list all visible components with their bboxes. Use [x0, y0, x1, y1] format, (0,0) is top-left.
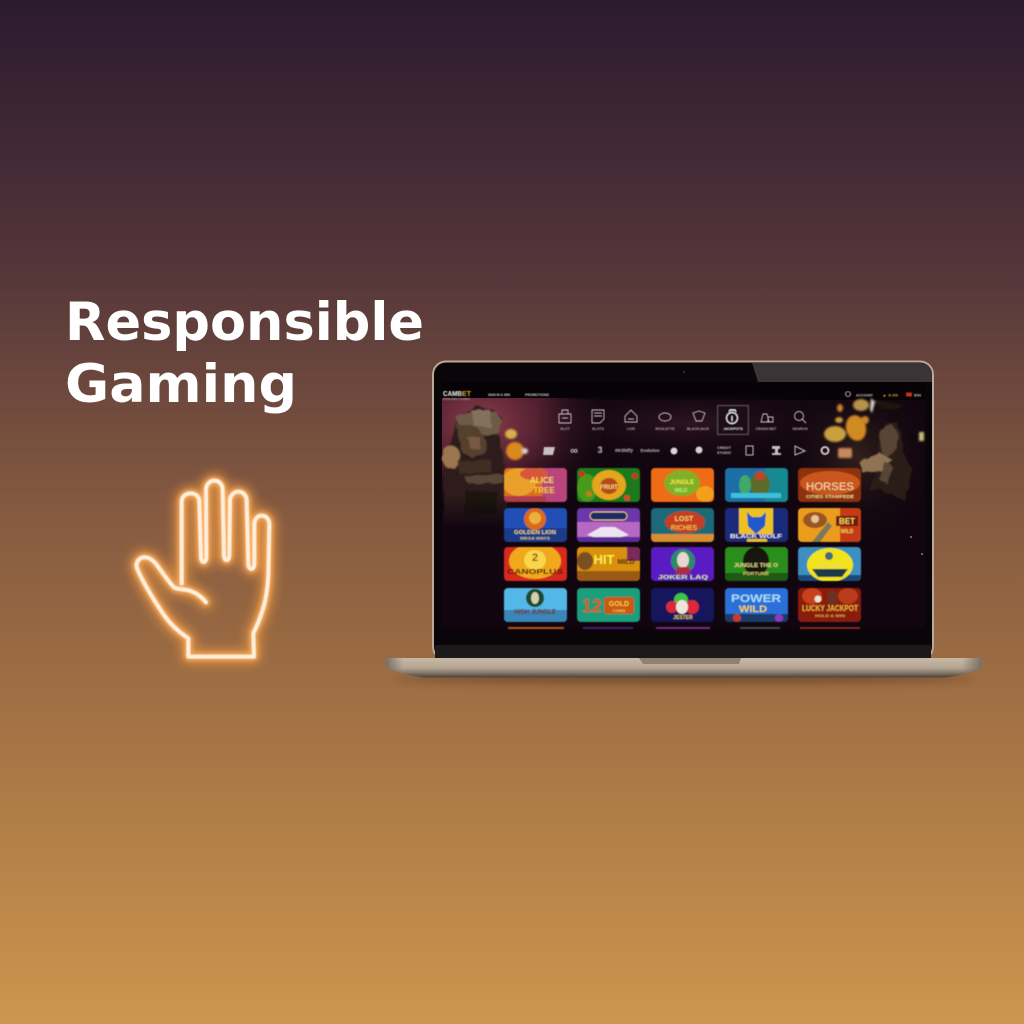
game tile grid	[502, 468, 862, 629]
screen background	[442, 382, 925, 628]
warrior body	[442, 406, 507, 525]
provider logo row: 3	[597, 445, 603, 455]
header right controls	[846, 392, 921, 398]
tile: teal twelve	[577, 588, 640, 622]
provider logo row: Evolution	[640, 448, 660, 453]
tile: orange bet: WILD	[841, 529, 854, 535]
maroon backdrop left	[442, 398, 602, 518]
tile: blue wolf	[725, 508, 788, 542]
laptop shadow	[394, 675, 974, 683]
tile: green cave	[725, 547, 788, 582]
provider logo row	[543, 445, 828, 457]
tile: orange bet: BET	[839, 517, 855, 526]
icon: slots	[559, 410, 571, 423]
tile: power wild: POWER	[731, 593, 781, 605]
selected category box	[718, 406, 748, 434]
tile: navy jester	[651, 588, 714, 622]
tile: pirate	[725, 468, 788, 502]
top navigation band	[442, 382, 925, 400]
tile: horses: CITIES STAMPEDE	[806, 494, 854, 499]
tile: Alice tree	[502, 468, 567, 502]
base end shading	[385, 658, 983, 678]
right warrior and coins	[824, 398, 924, 500]
tile: green cave: FORTUNE	[743, 571, 769, 576]
laptop lid	[433, 362, 933, 660]
brand logo: ET	[462, 391, 472, 398]
tile: teal twelve: 12	[582, 596, 602, 616]
category navigation labels: SEARCH	[792, 427, 808, 431]
tile: horses	[798, 468, 862, 502]
screen	[442, 382, 925, 629]
tile: red fire: LUCKY JACKPOT	[802, 604, 858, 613]
maroon backdrop centre	[540, 395, 840, 465]
tile: lost treasure	[651, 508, 714, 542]
icon: neon raised hand	[137, 481, 269, 657]
header right controls: ACCOUNT	[856, 392, 873, 398]
tile: power wild	[725, 588, 788, 622]
category navigation labels: ROULETTE	[655, 427, 675, 431]
brand logo: PROMOTIONS	[525, 392, 549, 397]
provider logo row: ∞	[570, 445, 578, 457]
tile: green cave: JUNGLE THE O	[734, 563, 778, 569]
tile: yellow circle	[798, 547, 862, 582]
provider logo row: CREDIT	[717, 446, 732, 450]
camera dot	[683, 371, 685, 373]
partial next row of tiles	[508, 627, 860, 629]
header right controls: EN	[914, 392, 921, 398]
icon: chess pieces	[761, 414, 773, 422]
laptop	[385, 362, 983, 683]
tile: sky jungle: HIGH JUNGLE	[514, 609, 556, 616]
provider logo row: mrslotty	[615, 448, 633, 454]
header right controls: ▲ 0.00	[882, 392, 899, 398]
tile: blue wolf: BLACK WOLF	[730, 534, 782, 540]
brand logo: SIGN IN & WIN	[488, 392, 510, 397]
icon: roulette	[659, 413, 671, 421]
base body	[385, 658, 983, 678]
tile: teal twelve: COINS	[613, 608, 626, 613]
title	[65, 292, 424, 415]
tile: orange bet	[798, 508, 862, 542]
icon: blackjack cards	[693, 411, 705, 421]
tile: blue lion: MEGA WAYS	[520, 536, 551, 540]
tile: purple clown: JOKER LAQ	[658, 575, 709, 581]
icon: search handle	[802, 419, 806, 423]
tile: red fire: HOLD & WIN	[815, 613, 845, 618]
category navigation labels: SLOTS	[592, 427, 605, 431]
tile: power wild: WILD	[739, 604, 768, 614]
tile: canopus: CANOPLUS	[507, 567, 563, 576]
warrior fade to dark	[442, 495, 506, 527]
tile: purple clown	[651, 547, 714, 582]
icon: jackpot handle	[729, 410, 736, 421]
category navigation icons	[559, 406, 806, 434]
tile: navy jester: JESTER	[673, 615, 693, 621]
tile: yacht	[577, 508, 640, 542]
tile: blue lion	[504, 508, 567, 542]
tile: canopus: 2	[532, 552, 538, 564]
tile: orange jungle	[651, 468, 714, 502]
icon: search	[794, 412, 804, 420]
left warrior artwork	[442, 406, 507, 527]
small sparkle dots	[910, 536, 923, 555]
tile: sky jungle	[504, 588, 567, 622]
tile: hit: HIT	[594, 552, 615, 567]
tile: canopus	[504, 543, 567, 582]
category navigation labels: LIVE	[627, 427, 636, 431]
category navigation labels: BLACKJACK	[687, 427, 710, 431]
icon: live table	[625, 410, 637, 422]
tile: orange jungle: WILD	[675, 488, 688, 494]
category navigation labels: SLOT	[560, 427, 571, 431]
tile: yellow circle: FISH BIG	[817, 564, 843, 570]
tile: lost treasure: RICHES	[671, 525, 698, 532]
tile: hit: MILD	[617, 559, 635, 566]
tile: orange jungle: JUNGLE	[670, 480, 694, 486]
tile: Alice tree: TREE	[533, 486, 555, 495]
tile: horses: HORSES	[806, 481, 854, 493]
tile: sunflower: FRUIT	[600, 485, 618, 491]
base notch	[639, 658, 741, 664]
tile: teal twelve: GOLD	[609, 601, 629, 608]
tile: lost treasure: LOST	[675, 516, 694, 523]
tile: Alice tree: ALICE	[530, 476, 555, 485]
brand logo: CAMB	[443, 391, 462, 398]
category navigation labels: JACKPOTS	[723, 427, 743, 431]
left gold coins	[505, 429, 528, 460]
right dark brown backdrop	[790, 400, 925, 540]
camera bar reflection	[752, 363, 932, 382]
lower bezel	[435, 645, 931, 658]
brand logo	[443, 391, 549, 401]
brand logo: BONUSES CASINO	[443, 397, 471, 401]
tile: blue lion: GOLDEN LION	[514, 530, 556, 536]
title: Gaming	[65, 354, 297, 415]
tile: sunflower	[577, 468, 640, 502]
tile: red fire	[798, 588, 862, 622]
category navigation labels: CRASH BET	[756, 427, 777, 431]
hooded figure	[860, 422, 912, 500]
title: Responsible	[65, 292, 424, 353]
provider logo row: STUDIO	[717, 451, 731, 455]
category navigation labels	[560, 427, 808, 431]
icon: jackpot	[726, 412, 738, 424]
laptop base	[385, 658, 983, 678]
icon: cards list	[592, 410, 604, 423]
tile: hit	[577, 547, 640, 582]
coins	[824, 398, 924, 458]
